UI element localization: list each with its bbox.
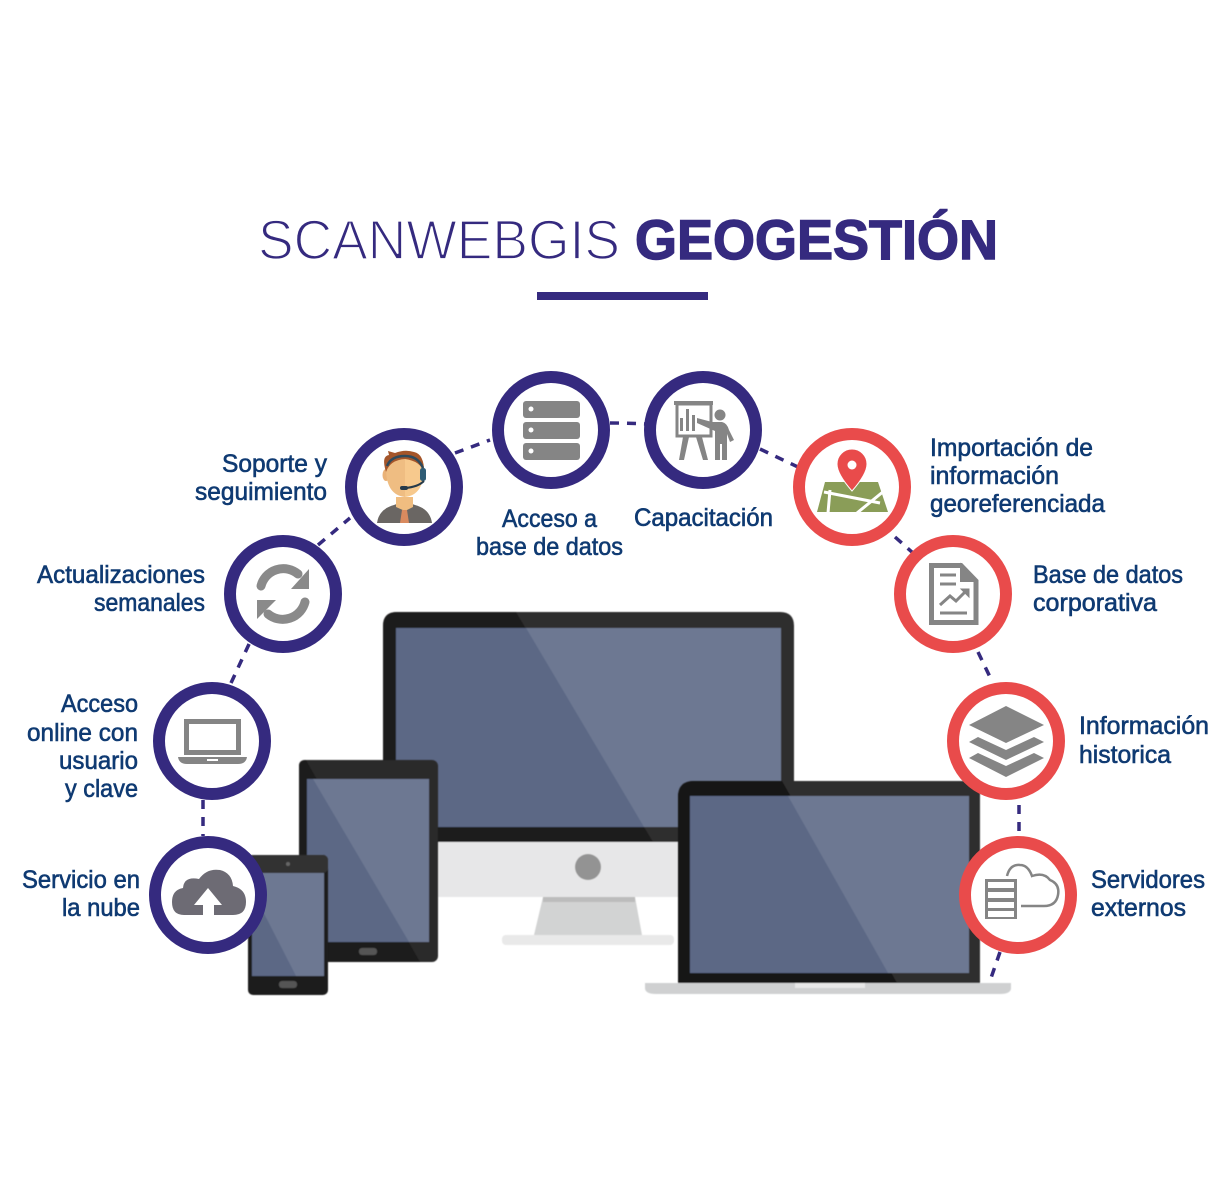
icon: presenter at board [674, 401, 734, 460]
icon: sync arrows [257, 569, 309, 619]
node: Servicio en la nube [155, 842, 261, 948]
label: Acceso online con usuario y clave: online con [27, 719, 138, 747]
label: Información historica [1079, 712, 1209, 769]
label: Información historica: historica [1079, 741, 1171, 769]
desktop monitor [383, 612, 794, 945]
label: Importación de información georeferenciada: Importación de [930, 434, 1093, 462]
node: Información historica [953, 688, 1059, 794]
label: Servicio en la nube [22, 866, 140, 922]
icon: server stack [523, 401, 580, 460]
smartphone [248, 855, 328, 995]
label: Base de datos corporativa: corporativa [1033, 589, 1157, 617]
label: Servidores externos: externos [1091, 894, 1186, 922]
icon: document chart [932, 565, 976, 622]
label: Acceso online con usuario y clave [27, 690, 138, 803]
label: Base de datos corporativa [1033, 561, 1183, 617]
node: Soporte [351, 434, 457, 540]
title underline [537, 292, 708, 300]
label: Soporte y seguimiento: Soporte y [222, 450, 327, 478]
label: Servidores externos [1091, 866, 1205, 922]
icon: support agent [377, 451, 432, 523]
tablet [299, 760, 438, 962]
icon: layers [969, 706, 1044, 777]
label: Importación de información georeferenciada: información [930, 462, 1059, 490]
label: Acceso online con usuario y clave: usuario [59, 747, 138, 775]
label: Importación de información georeferenciada: georeferenciada [930, 490, 1105, 518]
label: Información historica: Información [1079, 712, 1209, 740]
label: Actualizaciones semanales: Actualizaciones [37, 561, 205, 589]
label: Acceso online con usuario y clave: Acceso [61, 690, 138, 718]
title: SCANWEBGIS [258, 208, 620, 271]
laptop [645, 781, 1011, 994]
label: Soporte y seguimiento: seguimiento [195, 478, 327, 506]
icon: cloud upload [172, 870, 246, 917]
node: Servidores externos [965, 842, 1071, 948]
title: GEOGESTIÓN [635, 208, 998, 271]
label: Actualizaciones semanales [37, 561, 205, 617]
label: Soporte y seguimiento [195, 450, 327, 506]
label: Capacitación: Capacitación [634, 504, 773, 532]
title [258, 208, 998, 271]
node: Capacitación [650, 377, 756, 483]
node: Base de datos corporativa [900, 541, 1006, 647]
label: Acceso a base de datos: Acceso a [502, 505, 597, 533]
node: Importación [799, 434, 905, 540]
label: Importación de información georeferenciada [930, 434, 1105, 518]
label: Base de datos corporativa: Base de datos [1033, 561, 1183, 589]
label: Servidores externos: Servidores [1091, 866, 1205, 894]
node: Acceso online [159, 688, 265, 794]
label: Acceso a base de datos [476, 505, 623, 561]
icon: map pin [817, 449, 888, 513]
label: Actualizaciones semanales: semanales [94, 589, 205, 617]
label: Acceso a base de datos: base de datos [476, 533, 623, 561]
icon: server cloud [985, 865, 1058, 919]
label: Acceso online con usuario y clave: y clave [65, 775, 138, 803]
icon: laptop [178, 722, 247, 764]
label: Servicio en la nube: Servicio en [22, 866, 140, 894]
dashed connector arc [203, 423, 1019, 978]
label: Servicio en la nube: la nube [62, 894, 140, 922]
node: Actualizaciones [230, 541, 336, 647]
node: Acceso a base de datos [498, 377, 604, 483]
